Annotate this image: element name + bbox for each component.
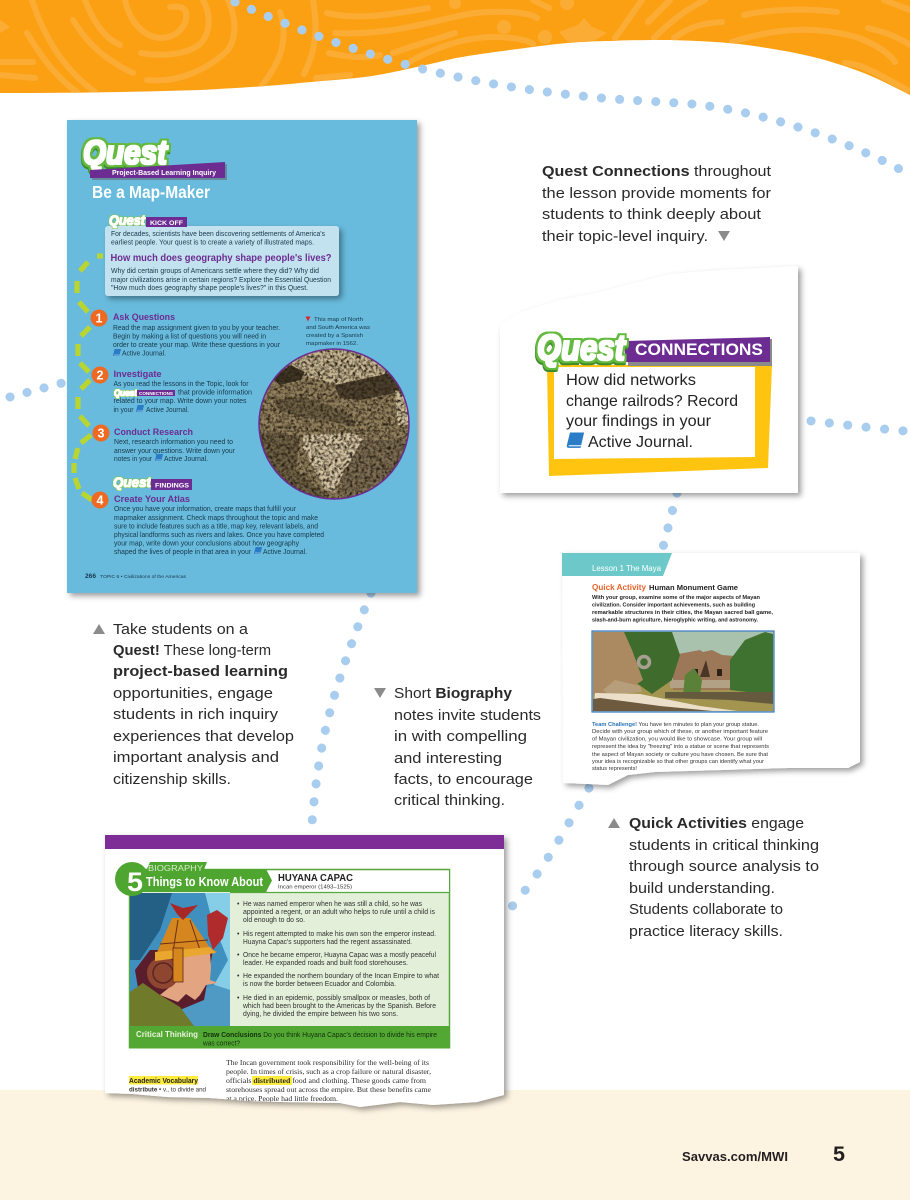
text block: quick activities caption: build understanding. bbox=[629, 880, 775, 897]
photo: maya ruins bbox=[592, 631, 774, 712]
purple top bar bbox=[105, 835, 504, 849]
page footer bbox=[85, 573, 187, 580]
team challenge text: represent the idea by "freezing" into a statue or scene that represents bbox=[592, 744, 769, 750]
five facts list: He expanded the northern boundary of the Incan Empire to what bbox=[243, 973, 439, 980]
yellow frame bbox=[547, 365, 772, 476]
team challenge text bbox=[592, 722, 769, 772]
text block: biography caption: and interesting bbox=[394, 750, 502, 767]
connections question bbox=[566, 372, 738, 451]
text block: biography caption: critical thinking. bbox=[394, 792, 505, 809]
step: create your atlas: Create Your Atlas bbox=[114, 494, 190, 505]
text block: quick activities caption bbox=[608, 815, 819, 940]
team challenge text: status represents! bbox=[592, 766, 637, 772]
map caption: mapmaker in 1562. bbox=[306, 341, 358, 347]
academic vocabulary sidebar: distribute • v., to divide and bbox=[129, 1088, 206, 1094]
activity instructions: civilization. Consider important achievements, such as building bbox=[592, 602, 755, 608]
team challenge text: Decide with your group which of these, or another important feature bbox=[592, 729, 768, 735]
five facts list: appointed a regent, or an adult who helps to rule until a child is bbox=[243, 909, 435, 916]
team challenge text: of Mayan civilization, you would like to showcase. Your group will bbox=[592, 736, 762, 742]
header: 5 things to know about: Things to Know About bbox=[146, 874, 264, 889]
panel: quick activity page bbox=[562, 553, 860, 785]
step badge 1: 1 bbox=[96, 312, 103, 326]
purple connections banner bbox=[625, 337, 772, 366]
step: conduct research: Conduct Research bbox=[114, 427, 193, 438]
step: ask questions: Begin by making a list of questions you will need in bbox=[113, 334, 266, 340]
critical thinking bar bbox=[129, 1026, 450, 1048]
subject name: Incan emperor (1493–1525) bbox=[278, 884, 352, 890]
step: create your atlas bbox=[114, 494, 324, 556]
kick off box: For decades, scientists have been discovering settlements of America's bbox=[111, 231, 326, 238]
step: investigate bbox=[114, 369, 252, 414]
critical thinking bar: Critical Thinking bbox=[136, 1030, 198, 1039]
kick off box: major civilizations arise in certain regions? Explore the Essential Question bbox=[111, 277, 331, 284]
activity instructions: With your group, examine some of the major aspects of Mayan bbox=[592, 595, 760, 601]
text block: quest connections caption: the lesson provide moments for bbox=[542, 185, 771, 202]
page footer: 266 bbox=[85, 573, 96, 580]
text block: quest caption: Take students on a bbox=[113, 621, 249, 638]
step: investigate: CONNECTIONS bbox=[139, 391, 173, 396]
green dashed timeline bbox=[74, 256, 103, 500]
text block: quick activities caption: students in critical thinking bbox=[629, 837, 819, 854]
step: create your atlas: physical landforms such as rivers and lakes. Once you have completed bbox=[114, 532, 324, 539]
step badge 2: 2 bbox=[97, 368, 104, 382]
biography box frame bbox=[130, 870, 450, 1048]
activity heading: Human Monument Game bbox=[649, 583, 738, 592]
lesson tab: Lesson 1 The Maya bbox=[592, 564, 662, 573]
critical thinking bar: Draw Conclusions Do you think Huyana Capac's decision to divide his empire bbox=[203, 1032, 437, 1039]
circular antique map bbox=[259, 349, 410, 499]
step: conduct research bbox=[114, 427, 236, 463]
text block: biography caption: notes invite students bbox=[394, 707, 541, 724]
step: investigate: related to your map. Write down your notes bbox=[114, 398, 247, 405]
step: ask questions: order to create your map. Write these questions in your bbox=[113, 342, 281, 349]
text block: quick activities caption: Students collaborate to bbox=[629, 901, 783, 918]
body paragraph: The Incan government took responsibility for the well-being of its bbox=[226, 1058, 429, 1067]
step: create your atlas: sure to include features such as a title, map key, relevant labels, and bbox=[114, 524, 318, 530]
text block: quest caption: citizenship skills. bbox=[113, 771, 231, 788]
map caption: and South America was bbox=[306, 325, 370, 331]
kick off box bbox=[105, 212, 339, 296]
body paragraph: officials distributed food and clothing. These goods came from bbox=[226, 1076, 426, 1085]
text block: quest caption: Quest! These long-term bbox=[113, 642, 271, 659]
text block: quest connections caption: their topic-level inquiry. bbox=[542, 228, 708, 245]
step: create your atlas: shaped the lives of people in that area in your bbox=[114, 549, 252, 556]
panel: biography page bbox=[105, 835, 504, 1107]
step: create your atlas: your map, write down your conclusions about how geography bbox=[114, 540, 300, 548]
step: investigate: that provide information bbox=[178, 390, 252, 396]
text block: quick activities caption: practice literacy skills. bbox=[629, 923, 783, 940]
body paragraph: storehouses spread out across the empire. But these benefits came bbox=[226, 1085, 432, 1094]
step: ask questions: Active Journal. bbox=[122, 350, 166, 358]
five facts list: old enough to do so. bbox=[243, 917, 305, 924]
body paragraph bbox=[226, 1058, 432, 1103]
kick off box: "How much does geography shape people's lives?" in this Quest. bbox=[111, 285, 308, 292]
five facts list: • bbox=[237, 995, 240, 1002]
step: create your atlas: Once you have your information, create maps that fulfill your bbox=[114, 506, 297, 513]
step: conduct research: Active Journal. bbox=[164, 456, 208, 463]
text block: quest caption: important analysis and bbox=[113, 749, 279, 766]
five facts list: Huayna Capac's supporters had the regent assassinated. bbox=[243, 939, 412, 946]
dotted path: right bbox=[811, 421, 905, 431]
step badge 4 bbox=[92, 492, 108, 508]
dotted path: quest to biography bbox=[312, 593, 371, 823]
subject name bbox=[278, 873, 353, 890]
team challenge text: the aspect of Mayan society or culture you have chosen. Be sure that bbox=[592, 752, 768, 758]
kick off box: Why did certain groups of Americans settle where they did? Why did bbox=[111, 268, 319, 275]
text block: quest connections caption: Quest Connections throughout bbox=[542, 163, 772, 180]
text block: biography caption: Short Biography bbox=[394, 685, 513, 702]
footer band bbox=[0, 1090, 910, 1200]
step badge 4: 4 bbox=[97, 494, 104, 508]
step: conduct research: answer your questions. Write down your bbox=[114, 448, 236, 455]
text block: quest caption bbox=[93, 621, 294, 788]
text block: quest connections caption bbox=[542, 163, 772, 245]
page number: 5 bbox=[833, 1143, 845, 1166]
academic vocabulary sidebar: Academic Vocabulary bbox=[129, 1076, 198, 1085]
page title: Be a Map-Maker bbox=[92, 182, 210, 202]
dotted path: top bbox=[235, 2, 905, 172]
lesson tab bbox=[562, 553, 672, 576]
text block: quest caption: opportunities, engage bbox=[113, 685, 273, 702]
activity instructions bbox=[592, 595, 773, 624]
five facts list: Once he became emperor, Huayna Capac was a mostly peaceful bbox=[243, 952, 436, 959]
academic vocabulary sidebar bbox=[129, 1076, 206, 1092]
step badge 3 bbox=[92, 424, 110, 442]
connections question: How did networks bbox=[566, 372, 696, 389]
header: 5 things to know about: 5 bbox=[127, 867, 143, 897]
step: ask questions bbox=[113, 312, 281, 358]
connections question: your findings in your bbox=[566, 413, 712, 430]
purple project banner: Project-Based Learning Inquiry bbox=[112, 168, 217, 177]
orange header band with fingerprint pattern bbox=[0, 0, 910, 100]
five facts list: which had been brought to the Americas by the Spanish. Before bbox=[242, 1003, 436, 1010]
text block: biography caption: facts, to encourage bbox=[394, 771, 533, 788]
quest logo: Quest bbox=[83, 134, 168, 172]
step: create your atlas: Active Journal. bbox=[263, 549, 307, 556]
step: investigate: Investigate bbox=[114, 369, 162, 380]
step: investigate: Active Journal. bbox=[146, 407, 189, 414]
step: investigate: in your bbox=[114, 407, 134, 414]
purple connections banner: CONNECTIONS bbox=[635, 340, 763, 359]
step: investigate: As you read the lessons in the Topic, look for bbox=[114, 381, 249, 388]
five facts list: He was named emperor when he was still a child, so he was bbox=[243, 901, 422, 908]
map caption bbox=[306, 316, 370, 347]
step: ask questions: Ask Questions bbox=[113, 312, 175, 323]
five facts list bbox=[237, 901, 439, 1018]
five facts list: His regent attempted to make his own son the emperor instead. bbox=[243, 931, 436, 938]
activity instructions: slash-and-burn agriculture, hieroglyphic writing, and astronomy. bbox=[592, 618, 758, 624]
step: conduct research: notes in your bbox=[114, 456, 153, 463]
quest findings label bbox=[113, 474, 192, 490]
step badge 3: 3 bbox=[98, 426, 105, 440]
step: ask questions: Read the map assignment given to you by your teacher. bbox=[113, 325, 280, 332]
five facts list: • bbox=[237, 901, 240, 908]
five facts list: He died in an epidemic, possibly smallpox or measles, both of bbox=[243, 995, 430, 1002]
body paragraph: people. In times of crisis, such as a crop failure or natural disaster, bbox=[226, 1067, 431, 1076]
purple project banner bbox=[90, 162, 227, 180]
step: conduct research: Next, research information you need to bbox=[114, 439, 233, 446]
page footer: TOPIC 6 • Civilizations of the Americas bbox=[100, 574, 187, 579]
header: 5 things to know about: BIOGRAPHY bbox=[148, 864, 204, 873]
five facts list: • bbox=[237, 973, 240, 980]
step: create your atlas: mapmaker assignment. Check maps throughout the topic and make bbox=[114, 515, 318, 522]
portrait of Huayna Capac bbox=[130, 893, 230, 1026]
map caption: created by a Spanish bbox=[306, 333, 363, 339]
quest findings label: FINDINGS bbox=[155, 482, 189, 490]
five facts list: is now the border between Ecuador and Colombia. bbox=[243, 981, 396, 988]
activity heading bbox=[592, 582, 738, 592]
kick off box: Quest bbox=[109, 212, 146, 228]
activity instructions: remarkable structures in their cities, the Mayan sacred ball game, bbox=[592, 610, 773, 616]
quest logo: Quest bbox=[537, 327, 627, 368]
panel: quest project page bbox=[67, 120, 417, 593]
panel: quest connections card bbox=[500, 266, 798, 493]
step badge 1 bbox=[90, 310, 108, 326]
academic vocabulary sidebar: give out bbox=[129, 1096, 150, 1102]
quest findings label: Quest bbox=[113, 474, 152, 490]
text block: quest caption: experiences that develop bbox=[113, 728, 294, 745]
connections question: Active Journal. bbox=[588, 434, 693, 451]
text block: biography caption: in with compelling bbox=[394, 728, 527, 745]
text block: quest caption: project-based learning bbox=[113, 663, 288, 680]
activity heading: Quick Activity bbox=[592, 582, 646, 592]
text block: biography caption bbox=[374, 685, 541, 809]
text block: quick activities caption: Quick Activities engage bbox=[629, 815, 804, 832]
connections question: change railrods? Record bbox=[566, 393, 738, 410]
subject name: HUYANA CAPAC bbox=[278, 873, 353, 884]
team challenge text: Team Challenge! You have ten minutes to plan your group statue. bbox=[592, 722, 759, 728]
kick off box: How much does geography shape people's lives? bbox=[110, 253, 332, 264]
text block: quest connections caption: students to think deeply about bbox=[542, 206, 762, 223]
dotted path: left bbox=[10, 382, 66, 397]
header: 5 things to know about bbox=[115, 862, 272, 897]
text block: quick activities caption: through source analysis to bbox=[629, 858, 819, 875]
five facts list: leader. He expanded roads and built food storehouses. bbox=[243, 960, 408, 967]
five facts list: • bbox=[237, 931, 240, 938]
step: investigate: Quest bbox=[114, 388, 138, 398]
step badge 2 bbox=[92, 366, 108, 384]
dotted path: activity to biography bbox=[508, 788, 589, 911]
kick off box: KICK OFF bbox=[150, 220, 183, 227]
critical thinking bar: was correct? bbox=[202, 1040, 240, 1048]
five facts list: dying, he divided the empire between his two sons. bbox=[243, 1011, 398, 1018]
text block: quest caption: students in rich inquiry bbox=[113, 706, 278, 723]
team challenge text: your idea is recognizable so that other groups can identify what your bbox=[592, 759, 764, 765]
five facts list: • bbox=[237, 952, 240, 959]
kick off box: earliest people. Your quest is to create a variety of illustrated maps. bbox=[111, 240, 314, 246]
map caption: This map of North bbox=[314, 317, 363, 323]
body paragraph: at a price. People had little freedom. bbox=[226, 1094, 338, 1103]
footer url: Savvas.com/MWI bbox=[682, 1149, 788, 1164]
dotted path: connections to activity bbox=[663, 493, 677, 547]
